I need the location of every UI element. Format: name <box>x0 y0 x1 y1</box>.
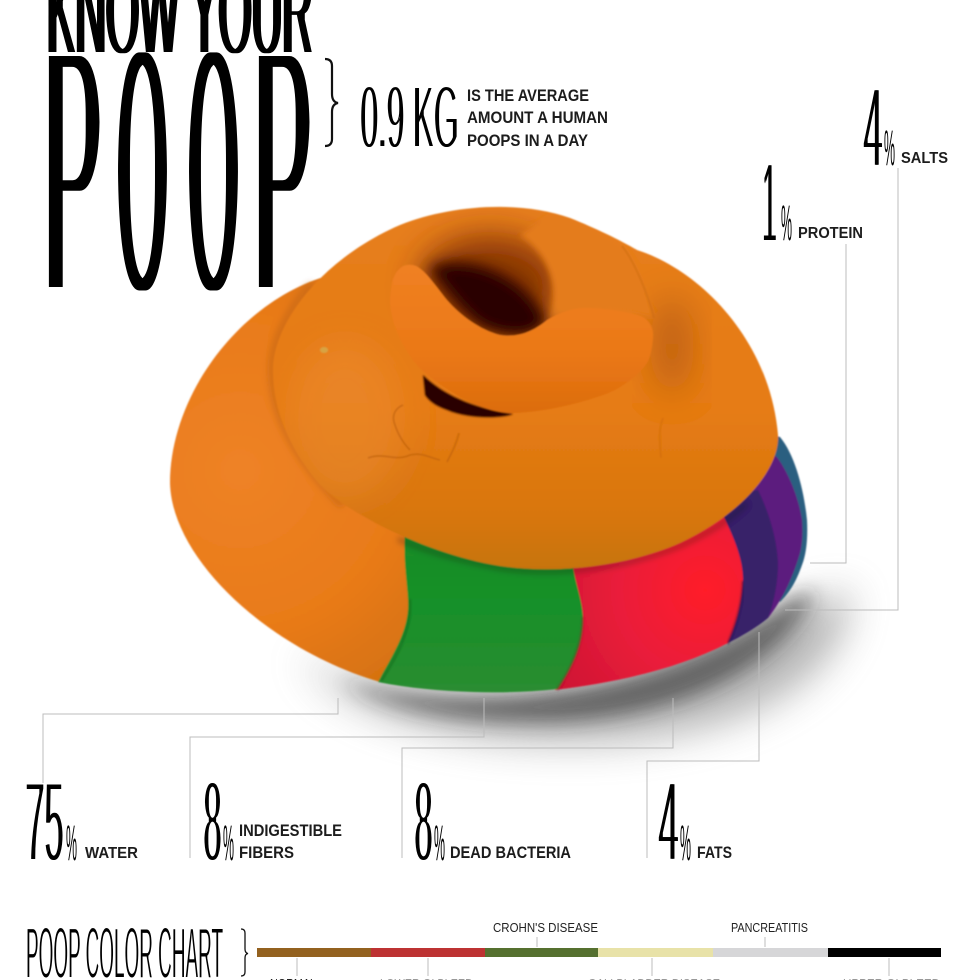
coil segment: dead bacteria red <box>555 515 743 690</box>
stat description: AMOUNT A HUMAN <box>467 108 608 127</box>
stat: water 75%: WATER <box>85 845 138 862</box>
coil segment: salts blue <box>740 425 807 602</box>
stat: fats 4%: 4 <box>658 759 678 886</box>
stat description <box>467 86 608 150</box>
chart label: pancreatitis <box>731 920 808 947</box>
stat: salts 4%: % <box>884 120 895 176</box>
stat: dead bacteria 8%: DEAD BACTERIA <box>450 843 571 862</box>
shading on middle ring <box>285 212 694 500</box>
stat: indigestible fibers 8%: % <box>223 815 234 871</box>
title: know your poop <box>45 0 313 372</box>
stat: protein 1%: 1 <box>762 140 776 267</box>
stat: dead bacteria 8%: % <box>434 815 445 871</box>
illustration: coiled poop <box>170 207 807 692</box>
dark halo around hole <box>418 235 562 335</box>
coil segment: fats indigo <box>700 490 778 643</box>
stat: protein 1% <box>762 140 863 267</box>
stat: indigestible fibers 8%: FIBERS <box>239 843 294 862</box>
upper ring right side <box>520 212 654 320</box>
stat: water 75%: % <box>66 815 77 871</box>
color chart bar <box>257 948 941 957</box>
coil segment: protein purple <box>735 440 802 618</box>
stat: salts 4%: SALTS <box>901 150 948 167</box>
tip of coil <box>390 265 653 413</box>
dark crevice under tip <box>423 375 513 417</box>
stat: dead bacteria 8% <box>414 759 571 886</box>
stat: fats 4%: % <box>680 815 691 871</box>
stat: water 75%: 75 <box>25 759 63 886</box>
speck <box>320 347 328 353</box>
shadow under poop <box>300 590 850 742</box>
chart label: pancreatitis: PANCREATITIS <box>731 920 808 935</box>
stat: 0.9 kg average: 0.9 KG <box>360 68 458 168</box>
stat: protein 1%: PROTEIN <box>798 225 863 242</box>
coil segment: indigestible fibers green <box>378 530 583 692</box>
stat: salts 4%: 4 <box>863 65 882 192</box>
coil segment: middle ring <box>273 207 778 569</box>
stat description: IS THE AVERAGE <box>467 86 589 105</box>
brace: title to stat <box>325 59 338 146</box>
contact shadows on lower coil <box>273 288 745 689</box>
stat: fats 4%: FATS <box>697 843 732 862</box>
chart labels below bar, cut off at the page edge <box>270 958 940 980</box>
leader lines <box>43 168 898 858</box>
stat: indigestible fibers 8% <box>203 759 342 886</box>
lip and cracks on middle ring <box>368 405 663 462</box>
chart label: crohn's disease: CROHN'S DISEASE <box>493 920 598 935</box>
stat: indigestible fibers 8%: INDIGESTIBLE <box>239 821 342 840</box>
chart label: crohn's disease <box>493 920 598 947</box>
stat: indigestible fibers 8%: 8 <box>203 759 221 886</box>
dark hole <box>428 263 548 336</box>
ring seam <box>622 246 654 318</box>
coil segment: lower orange water <box>170 275 420 682</box>
stat: protein 1%: % <box>781 195 792 251</box>
brace: chart <box>241 929 248 976</box>
stat description: POOPS IN A DAY <box>467 131 589 150</box>
stat: dead bacteria 8%: 8 <box>414 759 432 886</box>
